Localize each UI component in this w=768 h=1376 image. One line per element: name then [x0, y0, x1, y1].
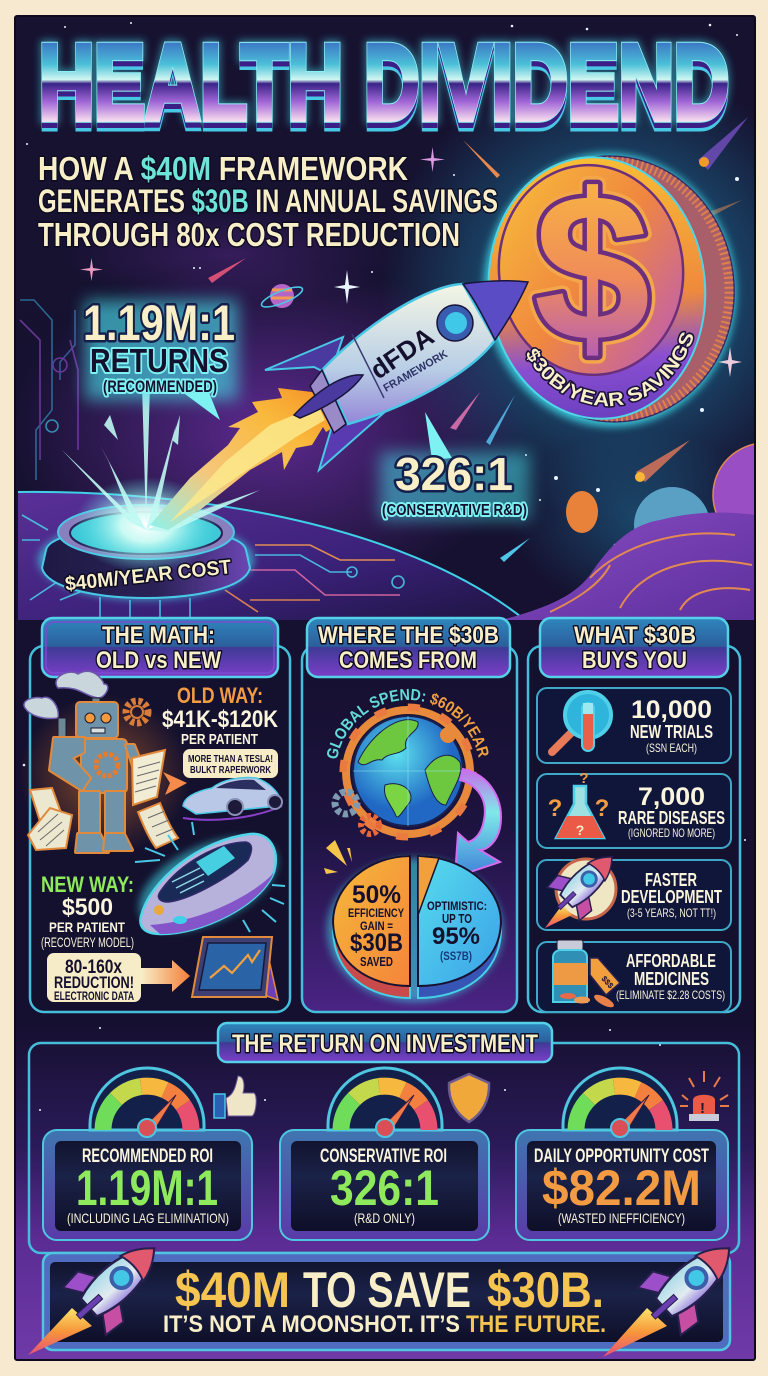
icon: flask with question marks: ? — [576, 822, 584, 838]
callout: 80-160x reduction: ELECTRONIC DATA — [54, 989, 134, 1003]
callout: 1.19M:1 returns: RETURNS — [90, 342, 228, 379]
card: affordable medicines: MEDICINES — [634, 969, 709, 989]
subtitle: THROUGH 80x COST REDUCTION — [38, 216, 460, 253]
icon: globe in gear — [343, 707, 473, 837]
new way pricing: $500 — [62, 894, 113, 921]
card: affordable medicines — [537, 940, 731, 1012]
callout: 326:1 conservative: (CONSERVATIVE R&D) — [382, 502, 527, 519]
card: affordable medicines: AFFORDABLE — [626, 951, 716, 971]
panel heading: what $30B buys: BUYS YOU — [582, 647, 687, 674]
arrow: global spend to savings — [455, 769, 501, 877]
pie chart: 50% efficiency vs 95% optimistic: GAIN = — [360, 919, 393, 933]
icon: rocket and clock — [542, 839, 629, 928]
rocket flame trail — [150, 388, 345, 530]
pie chart: 50% efficiency vs 95% optimistic: 95% — [432, 923, 480, 950]
section heading — [218, 1023, 552, 1062]
closing message: $30B. — [487, 1262, 604, 1318]
section heading: THE RETURN ON INVESTMENT — [232, 1030, 538, 1058]
hero nebula glows — [32, 82, 754, 584]
subtitle: HOW A $40M FRAMEWORK — [38, 150, 408, 187]
icon: glowing digital pod — [125, 818, 291, 950]
rocket: dFDA framework: dFDA — [365, 321, 440, 385]
pie chart: 50% efficiency vs 95% optimistic: 50% — [352, 881, 401, 909]
left circuit traces — [20, 300, 78, 480]
icon: rust gear — [126, 701, 148, 723]
arrow: to electronic data — [141, 960, 190, 992]
callout: more than a Tesla — [183, 749, 278, 778]
starfield — [23, 22, 746, 1111]
card: recommended ROI: RECOMMENDED ROI — [82, 1146, 213, 1167]
closing banner — [28, 1223, 752, 1357]
card: recommended ROI — [43, 1130, 252, 1240]
panel: what $30B buys you — [528, 618, 740, 1012]
card: recommended ROI: (INCLUDING LAG ELIMINATION) — [67, 1210, 229, 1226]
old way pricing: $41K-$120K — [162, 706, 279, 733]
arc label: global spend: GLOBAL SPEND: $60B/YEAR — [327, 688, 488, 758]
closing message: THE FUTURE. — [466, 1311, 606, 1338]
icon: paper scrolls — [28, 750, 178, 850]
orange moon — [566, 491, 598, 533]
panel heading: what $30B buys — [540, 618, 728, 677]
callout: 80-160x reduction: REDUCTION! — [54, 973, 134, 992]
callout: 1.19M:1 returns: 1.19M:1 — [83, 295, 235, 351]
panel heading: the math — [42, 618, 278, 677]
closing message: TO SAVE — [303, 1262, 471, 1318]
subtitle — [38, 150, 498, 253]
card: 10,000 new trials — [537, 688, 731, 763]
card: conservative ROI: 326:1 — [330, 1160, 439, 1216]
icon: tablet chart — [192, 937, 278, 1000]
panel heading: the math: OLD vs NEW — [96, 647, 221, 674]
card: conservative ROI: CONSERVATIVE ROI — [320, 1146, 447, 1167]
icon: alarm siren — [680, 1071, 729, 1121]
pie chart: 50% efficiency vs 95% optimistic: SAVED — [360, 954, 393, 969]
card: 7,000 rare diseases — [537, 770, 731, 848]
icon: emphasis rays — [324, 840, 352, 874]
icon: left rocket — [28, 1223, 177, 1355]
panel heading: where the $30B: COMES FROM — [339, 647, 477, 674]
panel: the math, old vs new — [20, 618, 291, 1012]
callout: 80-160x reduction — [47, 953, 141, 1003]
coin: $30B per year savings — [478, 148, 742, 432]
new way pricing: NEW WAY: — [41, 872, 134, 897]
icon: flask with question marks: ? — [595, 795, 609, 822]
launch pedestal: $40M per year cost — [38, 505, 254, 600]
icon: flask with question marks: ? — [548, 795, 562, 822]
card: 7,000 rare diseases: 7,000 — [638, 783, 705, 811]
card: recommended ROI: 1.19M:1 — [76, 1160, 218, 1216]
panel heading: the math: THE MATH: — [102, 622, 215, 649]
callout: more than a Tesla: MORE THAN A TESLA! — [188, 754, 273, 765]
gauge: conservative ROI — [328, 1068, 442, 1137]
new way pricing — [41, 872, 134, 950]
old way pricing — [162, 683, 279, 748]
card: faster development: FASTER — [645, 870, 697, 890]
pie chart: 50% efficiency vs 95% optimistic: $30B — [350, 929, 403, 957]
new way pricing: PER PATIENT — [49, 919, 125, 935]
card: 10,000 new trials: 10,000 — [631, 696, 712, 724]
gauge: recommended ROI — [90, 1068, 204, 1137]
panel heading: where the $30B: WHERE THE $30B — [318, 622, 499, 649]
card: 10,000 new trials: (SSN EACH) — [646, 741, 697, 755]
closing message: $40M — [175, 1262, 290, 1318]
panel: the return on investment — [29, 1023, 739, 1253]
callout: more than a Tesla: BULKT RAPERWORK — [190, 765, 272, 776]
pie chart: 50% efficiency vs 95% optimistic: OPTIMISTIC: — [427, 899, 487, 913]
card: conservative ROI: (R&D ONLY) — [354, 1210, 415, 1226]
card: faster development: (3-5 YEARS, NOT TT!) — [627, 906, 716, 920]
arrow: robot to car — [163, 772, 187, 795]
subtitle: GENERATES $30B IN ANNUAL SAVINGS — [38, 183, 498, 219]
icon: shield — [449, 1074, 489, 1122]
new way pricing: (RECOVERY MODEL) — [41, 934, 134, 950]
icon: magnifier and test tube — [552, 692, 611, 752]
old way pricing: OLD WAY: — [177, 683, 263, 708]
rocket: dFDA framework: FRAMEWORK — [382, 348, 450, 395]
icon: pill bottle, tag and pills: $$$ — [600, 974, 616, 991]
card: conservative ROI — [280, 1130, 489, 1240]
rocket: dFDA framework — [265, 281, 528, 470]
pie chart: 50% efficiency vs 95% optimistic — [327, 856, 503, 1002]
old way pricing: PER PATIENT — [181, 731, 258, 748]
planet horizon with circuits — [18, 492, 525, 620]
icon: pill bottle, tag and pills — [553, 940, 620, 1010]
card: daily opportunity cost: (WASTED INEFFICIENCY) — [558, 1210, 685, 1226]
icon: paperwork robot — [20, 671, 190, 855]
callout: 1.19M:1 returns — [83, 295, 238, 420]
small ringed planet — [259, 283, 305, 311]
launch pedestal: $40M per year cost: $40M/YEAR COST — [64, 556, 232, 596]
purple clouds — [506, 443, 754, 620]
closing message: IT’S NOT A MOONSHOT. IT’S — [163, 1311, 460, 1338]
icon: flask with question marks: ? — [579, 770, 589, 787]
pie chart: 50% efficiency vs 95% optimistic: (SS7B) — [440, 949, 472, 963]
icon: thumbs up — [214, 1076, 256, 1118]
coin: $30B per year savings: $ — [534, 150, 650, 385]
icon: Tesla car — [183, 777, 282, 820]
panel heading: where the $30B — [307, 618, 510, 677]
icon: alarm siren: ! — [700, 1100, 705, 1117]
card: faster development: DEVELOPMENT — [621, 887, 722, 907]
gauge: daily opportunity cost — [563, 1068, 677, 1137]
panel heading: what $30B buys: WHAT $30B — [574, 622, 696, 649]
callout: 326:1 conservative: 326:1 — [395, 448, 513, 500]
pie chart: 50% efficiency vs 95% optimistic: UP TO — [442, 911, 472, 926]
callout: 1.19M:1 returns: (RECOMMENDED) — [103, 377, 217, 396]
pie chart: 50% efficiency vs 95% optimistic: EFFICIENCY — [348, 906, 404, 920]
card: 7,000 rare diseases: (IGNORED NO MORE) — [628, 826, 715, 840]
coin: $30B per year savings: $ — [534, 150, 650, 385]
icon: small gears — [335, 792, 379, 834]
coin: $30B per year savings: $30B/YEAR SAVINGS — [525, 330, 694, 408]
card: daily opportunity cost: $82.2M — [542, 1160, 701, 1216]
callout: 80-160x reduction: 80-160x — [65, 957, 122, 978]
comets — [208, 117, 748, 562]
card: 7,000 rare diseases: RARE DISEASES — [618, 808, 725, 828]
closing message — [163, 1262, 606, 1338]
card: faster development — [537, 839, 731, 930]
panel: where the $30B comes from — [300, 616, 518, 1014]
card: 10,000 new trials: NEW TRIALS — [630, 722, 713, 742]
card: affordable medicines: (ELIMINATE $2.28 COSTS) — [616, 988, 725, 1002]
energy burst — [62, 385, 260, 573]
card: daily opportunity cost — [516, 1130, 728, 1240]
icon: right rocket — [603, 1223, 752, 1357]
icon: flask with question marks — [548, 770, 609, 838]
callout: 326:1 conservative — [380, 412, 530, 520]
